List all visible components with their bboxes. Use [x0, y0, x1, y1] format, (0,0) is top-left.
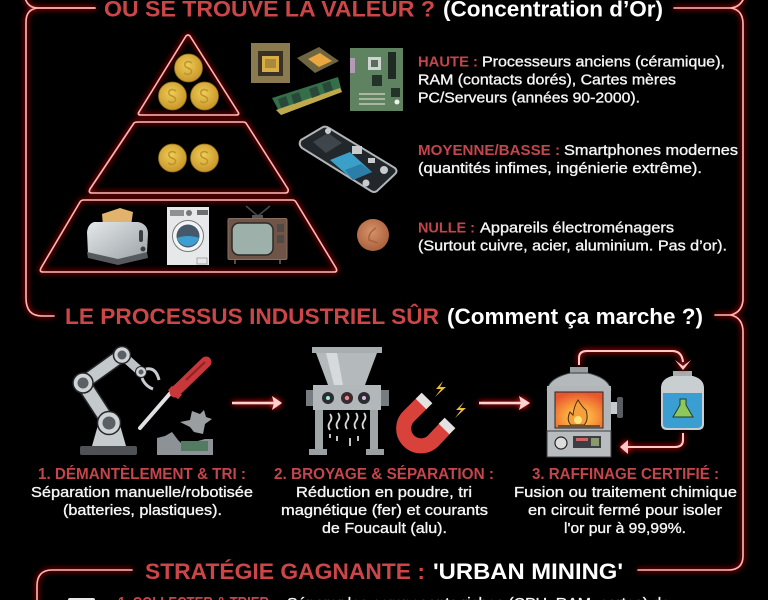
icon: furnace — [547, 367, 623, 457]
text block: medium and low concentration: Smartphones modernes — [564, 143, 738, 159]
heading: stratégie gagnante: STRATÉGIE GAGNANTE : — [145, 559, 425, 584]
step 1 text — [31, 466, 253, 519]
step 2 text: de Foucault (alu). — [322, 520, 447, 537]
text block: high concentration: RAM (contacts dorés), Cartes mères — [418, 72, 676, 88]
step 2 text — [274, 466, 494, 537]
step 3 text: 3. RAFFINAGE CERTIFIÉ : — [532, 466, 719, 483]
icon: smartphone — [300, 127, 396, 192]
icon: electronic debris — [157, 410, 213, 455]
icon: chemical bottle — [661, 371, 704, 430]
heading: stratégie gagnante — [145, 559, 623, 584]
heading: le processus industriel sûr: (Comment ça marche ?) — [447, 304, 703, 329]
text block: no concentration: Appareils électroménagers — [480, 220, 674, 236]
text block: no concentration: NULLE : — [418, 220, 475, 236]
step 3 text: l'or pur à 99,99%. — [564, 520, 686, 537]
text block: medium and low concentration: (quantités infimes, ingénierie extrême). — [418, 161, 702, 177]
text block: no concentration: (Surtout cuivre, acier, aluminium. Pas d’or). — [418, 238, 727, 254]
icon: robot arm — [73, 346, 159, 455]
arrow: step 1 to step 2 — [232, 396, 282, 410]
step 1 text: Séparation manuelle/robotisée — [31, 484, 253, 501]
heading: le processus industriel sûr — [65, 304, 703, 329]
step 1 text: (batteries, plastiques). — [63, 502, 222, 519]
icon: processor package — [297, 47, 339, 73]
text block: high concentration: PC/Serveurs (années 90-2000). — [418, 90, 640, 106]
heading: le processus industriel sûr: LE PROCESSUS INDUSTRIEL SÛR — [65, 304, 439, 329]
icon: television — [228, 206, 287, 264]
step 2 text: magnétique (fer) et courants — [281, 502, 488, 519]
arrow: closed-circuit loop — [579, 351, 691, 454]
text block: high concentration — [418, 54, 725, 106]
step 2 text: Réduction en poudre, tri — [296, 484, 472, 501]
icon: screwdriver — [140, 362, 206, 428]
icon: collection — [68, 598, 95, 600]
step 2 text: 2. BROYAGE & SÉPARATION : — [274, 466, 494, 483]
icon: copper coin — [357, 219, 389, 251]
text block: no concentration — [418, 220, 727, 254]
arrow: step 2 to step 3 — [479, 396, 530, 410]
icon: motherboard — [350, 48, 403, 111]
icon: toaster — [87, 208, 148, 265]
icon: washing machine — [167, 207, 209, 265]
pyramid tier: high — [138, 35, 239, 115]
icon: ceramic processor — [251, 43, 290, 83]
step 3 text — [514, 466, 737, 537]
pyramid tier: none — [40, 200, 337, 272]
pyramid tier: medium — [89, 122, 288, 193]
text block: high concentration: HAUTE : — [418, 54, 478, 70]
icon: shredder — [306, 347, 389, 455]
heading: stratégie gagnante: 'URBAN MINING' — [433, 559, 623, 584]
text block: medium and low concentration: MOYENNE/BASSE : — [418, 143, 560, 159]
text block: medium and low concentration — [418, 143, 738, 177]
gold coins — [158, 54, 218, 172]
icon: RAM module — [272, 77, 342, 115]
icon: magnet — [404, 381, 466, 446]
step 3 text: en circuit fermé pour isoler — [528, 502, 722, 519]
pyramid of gold concentration — [40, 35, 389, 272]
step 3 text: Fusion ou traitement chimique — [514, 484, 737, 501]
step 1 text: 1. DÉMANTÈLEMENT & TRI : — [38, 466, 246, 483]
strategy item: collect and sort — [68, 595, 670, 600]
text block: high concentration: Processeurs anciens (céramique), — [482, 54, 725, 70]
heading: où se trouve la valeur — [104, 0, 663, 22]
